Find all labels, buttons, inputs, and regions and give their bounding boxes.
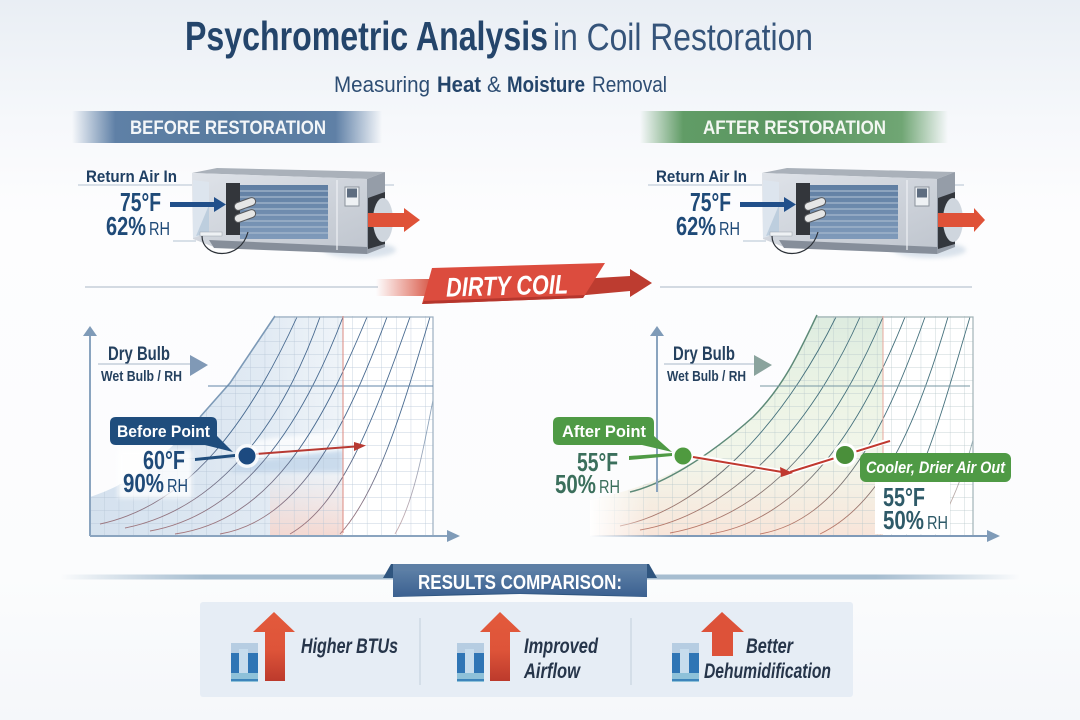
axes (90, 334, 450, 536)
subtitle: & (487, 72, 501, 97)
result: improved airflow (457, 612, 599, 683)
result: better dehumidification: Better (746, 635, 794, 658)
subtitle: Heat (437, 72, 482, 97)
banner: before restoration: BEFORE RESTORATION (130, 117, 326, 139)
return air label: Return Air In (86, 168, 177, 186)
title: Psychrometric Analysis (185, 13, 548, 59)
return air humidity: 62% (106, 211, 146, 241)
return air humidity: 62% (676, 211, 716, 241)
saturation curve (630, 315, 817, 492)
heading: results comparison: RESULTS COMPARISON: (418, 572, 622, 594)
banner: after restoration (640, 111, 948, 143)
after end humidity: 50% (883, 505, 924, 535)
callout: dirty coil arrow: DIRTY COIL (446, 269, 568, 303)
arrow: air in (170, 197, 226, 212)
axes (656, 334, 658, 492)
callout: cooler, drier air out: Cooler, Drier Air Out (866, 458, 1006, 477)
point: after end (833, 443, 857, 467)
after end temperature: 55°F (883, 482, 925, 512)
arrow: air in (740, 197, 796, 212)
chart: before psychrometric chart (83, 316, 460, 542)
icon: air handler unit before (192, 168, 396, 258)
banner: before restoration (72, 111, 382, 143)
before values backdrop (118, 450, 192, 498)
result: higher BTUs (231, 612, 398, 682)
callout: before point (110, 417, 233, 452)
result: better dehumidification (672, 612, 831, 683)
result: higher BTUs: Higher BTUs (301, 635, 398, 658)
panel: after air handler (648, 168, 985, 258)
saturation curve (200, 316, 275, 417)
after start temperature: 55°F (577, 447, 618, 477)
arrow: air out (938, 208, 985, 232)
icon: air handler unit after (762, 168, 966, 258)
axis label: dry bulb: Dry Bulb (108, 344, 170, 365)
return air humidity: RH (149, 219, 170, 239)
process line (692, 441, 888, 473)
subtitle: Measuring (334, 72, 430, 97)
after start humidity: RH (599, 477, 620, 497)
return air humidity: RH (719, 219, 740, 239)
before humidity: RH (167, 476, 188, 496)
heading: results comparison (383, 564, 657, 597)
callout: after point: After Point (562, 422, 646, 441)
result: better dehumidification: Dehumidification (704, 660, 831, 683)
subtitle: Removal (592, 72, 667, 97)
after end values backdrop (875, 480, 950, 534)
after start humidity: 50% (555, 469, 596, 499)
callout: before point: Before Point (117, 422, 210, 441)
result: improved airflow: Airflow (523, 660, 581, 683)
panel: before air handler (78, 168, 420, 258)
callout: dirty coil arrow (376, 263, 652, 304)
subtitle: Moisture (507, 72, 585, 97)
point: after start (674, 448, 692, 464)
axis label: wet bulb: Wet Bulb / RH (667, 368, 746, 385)
after end humidity: RH (927, 513, 948, 533)
result: improved airflow: Improved (524, 635, 599, 658)
return air temperature: 75°F (120, 187, 161, 217)
callout: after point (553, 417, 672, 452)
chart: after psychrometric chart (553, 315, 1011, 542)
arrow: air out (368, 208, 420, 232)
axis label: dry bulb: Dry Bulb (673, 344, 735, 365)
axis label: wet bulb: Wet Bulb / RH (101, 368, 182, 385)
panel: results (200, 602, 853, 697)
process line (256, 446, 355, 454)
return air label: Return Air In (656, 168, 747, 186)
before temperature: 60°F (143, 445, 185, 475)
point: before (235, 444, 259, 468)
callout: cooler, drier air out (860, 453, 1011, 482)
return air temperature: 75°F (690, 187, 731, 217)
subtitle (334, 72, 667, 97)
before humidity: 90% (123, 468, 164, 498)
chart shading (590, 316, 973, 540)
banner: after restoration: AFTER RESTORATION (703, 117, 886, 139)
chart shading (90, 316, 433, 536)
title: in Coil Restoration (553, 17, 813, 59)
